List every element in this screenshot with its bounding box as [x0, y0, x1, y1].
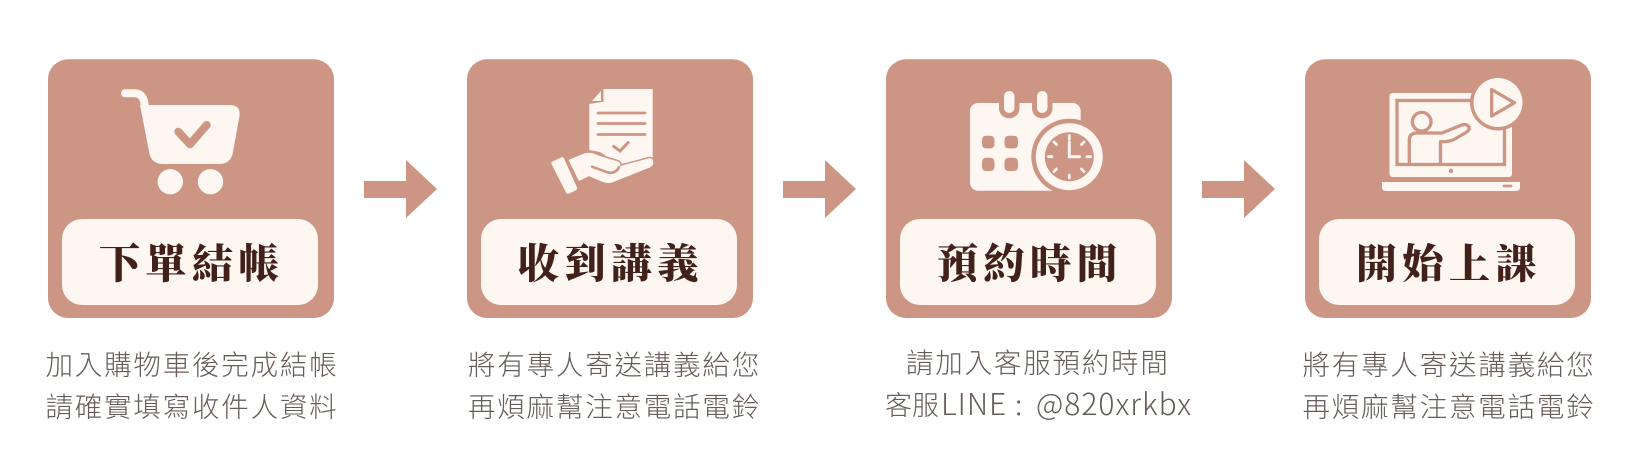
title label: step 1: [62, 219, 318, 305]
text block: step 2 description: 再煩麻幫注意電話電鈴: [468, 392, 761, 422]
text block: step 3 description: @820xrkbx: [1036, 380, 1192, 424]
title label: step 2: 收到講義: [518, 241, 704, 287]
icon: hand holding document: [551, 89, 654, 194]
text block: step 1 description: [46, 350, 338, 422]
text block: step 4 description: [1302, 350, 1596, 422]
text block: step 2 description: 將有專人寄送講義給您: [468, 350, 761, 380]
title label: step 4: [1319, 219, 1575, 305]
text block: step 1 description: 請確實填寫收件人資料: [46, 392, 338, 422]
text block: step 3 description: 客服: [885, 384, 939, 423]
text block: step 4 description: 再煩麻幫注意電話電鈴: [1302, 392, 1596, 422]
text block: step 3 description: LINE: [941, 380, 1007, 424]
text block: step 3 description: [885, 348, 1192, 424]
text block: step 2 description: [468, 350, 761, 422]
title label: step 2: [481, 219, 737, 305]
title label: step 3: [900, 219, 1156, 305]
arrow: step 3 to 4: [1202, 160, 1275, 218]
arrow: step 1 to 2: [364, 160, 437, 218]
text block: step 1 description: 加入購物車後完成結帳: [46, 350, 338, 380]
panel: step 4 start class: [1305, 59, 1591, 318]
panel: step 1 order checkout: [48, 59, 334, 318]
icon: shopping cart: [125, 93, 240, 194]
panel: step 2 receive handouts: [467, 59, 753, 318]
arrow: step 2 to 3: [783, 160, 856, 218]
text block: step 3 description: 請加入客服預約時間: [906, 348, 1170, 378]
panel: step 3 book a time: [886, 59, 1172, 318]
title label: step 3: 預約時間: [937, 241, 1123, 287]
title label: step 4: 開始上課: [1356, 241, 1542, 287]
icon: calendar with clock: [970, 85, 1107, 195]
text block: step 3 description: :: [1015, 382, 1022, 424]
icon: laptop with online lesson: [1382, 74, 1526, 191]
title label: step 1: 下單結帳: [99, 241, 285, 287]
text block: step 4 description: 將有專人寄送講義給您: [1302, 350, 1596, 380]
